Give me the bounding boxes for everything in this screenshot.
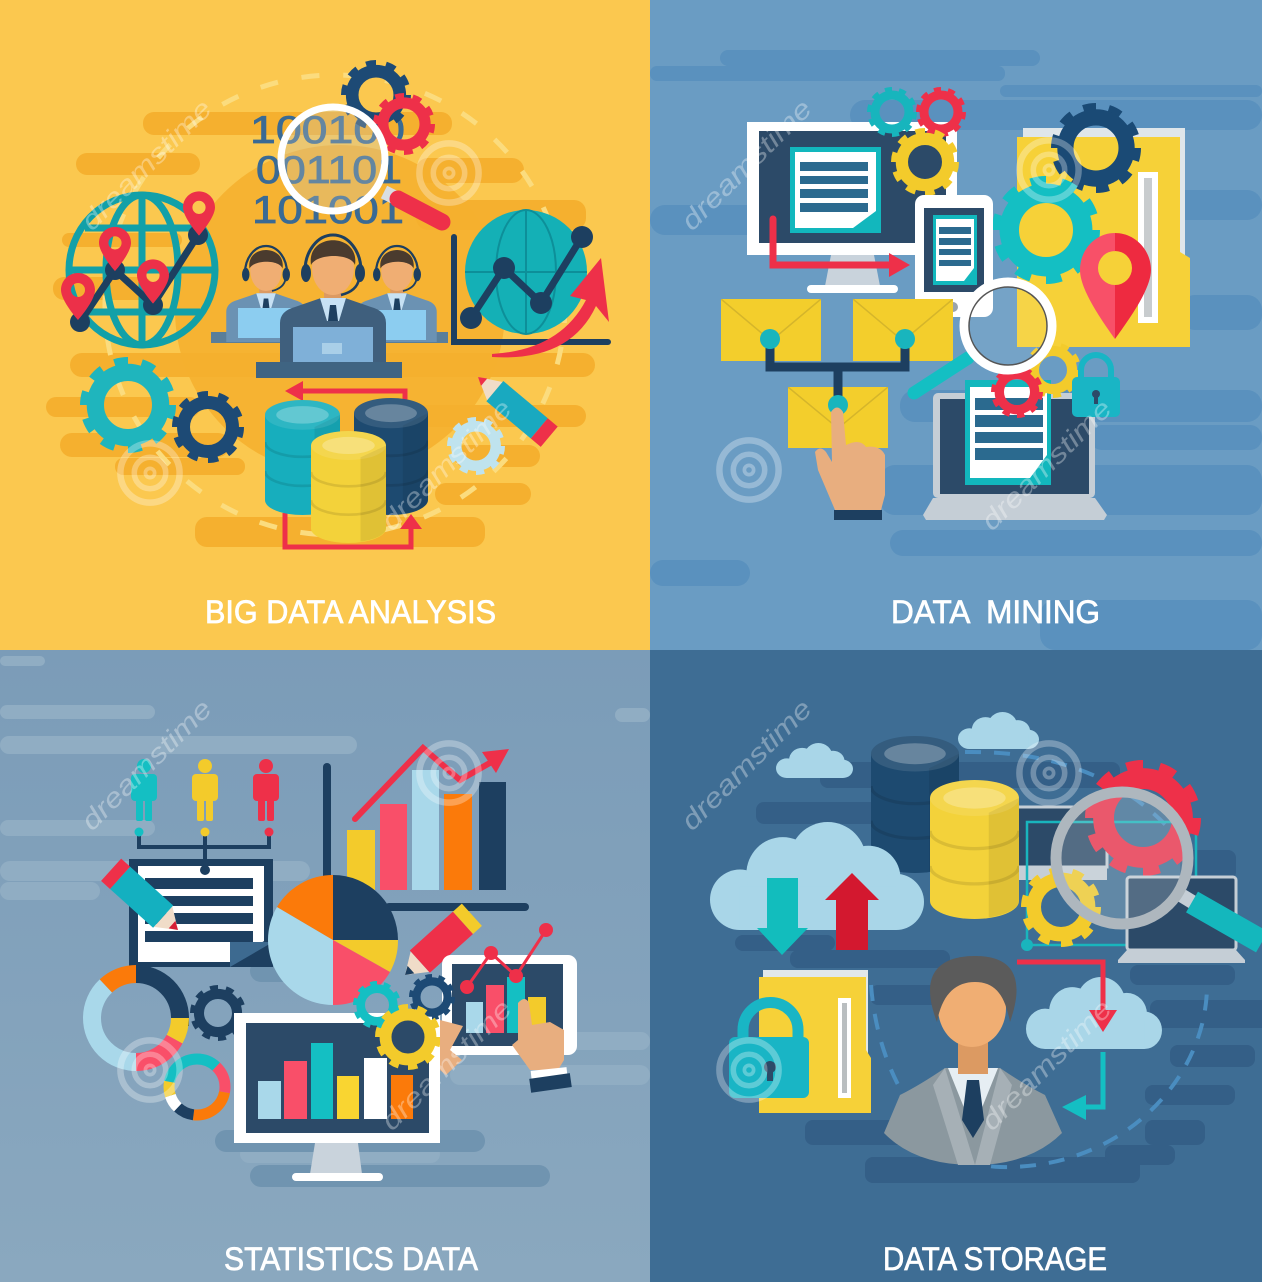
title: BIG DATA ANALYSIS — [205, 594, 496, 630]
icon: top gears — [345, 64, 431, 151]
icon: envelopes — [721, 299, 953, 448]
panel: statistics data — [0, 650, 650, 1282]
icon: desktop monitor with bars — [234, 1013, 440, 1181]
icon: small cloud top — [958, 712, 1039, 749]
panel: data mining — [650, 0, 1262, 650]
binary digits: 001101 — [256, 149, 402, 192]
icon: smartphone — [915, 195, 993, 317]
icon: pointing hand — [815, 408, 885, 520]
icon: dark database — [871, 736, 959, 873]
arrow: monitor to phone — [773, 219, 910, 277]
icon: large magnifier — [1056, 792, 1262, 942]
icon: gears left — [86, 363, 240, 459]
binary digits — [250, 109, 405, 232]
icon: padlock — [1072, 355, 1120, 417]
icon: hands on tablet — [440, 999, 572, 1093]
icon: location pin — [1080, 233, 1151, 339]
title: DATA STORAGE — [883, 1241, 1107, 1277]
panel: data storage — [650, 650, 1262, 1282]
icon: desktop monitor — [747, 122, 957, 293]
icon: folder gears — [998, 108, 1136, 278]
icon: globe with pins — [61, 191, 215, 345]
icon: folder with padlock — [729, 970, 871, 1113]
icon: yellow database — [930, 780, 1019, 919]
icon: cloud with arrows — [1017, 962, 1162, 1120]
icon: red and yellow gears — [1026, 767, 1194, 942]
dashed links — [871, 752, 1207, 1167]
icon: teal pencil — [101, 859, 188, 941]
watermark: dreamstime — [75, 693, 218, 836]
icon: pale gear — [450, 420, 502, 472]
watermark — [75, 93, 1118, 1136]
watermark: dreamstime — [675, 93, 818, 236]
icon: three support agents — [211, 235, 448, 378]
icon: document — [129, 859, 273, 967]
icon: cluster of gears — [356, 977, 452, 1066]
icon: tablet with chart — [442, 923, 577, 1055]
watermark: dreamstime — [975, 393, 1118, 536]
icon: database cylinders — [265, 381, 428, 547]
icon: red pencil — [395, 904, 482, 986]
icon: big cloud with arrows — [710, 822, 924, 955]
icon: three people — [131, 759, 279, 870]
icon: laptop gears — [994, 345, 1078, 415]
icon: small cloud left — [776, 743, 853, 778]
icon: laptop with document — [923, 380, 1107, 520]
title: DATA MINING — [891, 594, 1100, 630]
watermark: dreamstime — [375, 393, 518, 536]
binary digits: 100100 — [250, 109, 405, 152]
icon: laptop behind — [1015, 807, 1107, 880]
icon: magnifier — [914, 282, 1052, 393]
icon: monitor gears — [870, 90, 963, 192]
bar chart: columns with trend — [323, 748, 529, 911]
icon: folder — [1017, 128, 1190, 347]
icon: pencil — [470, 367, 558, 447]
chart: small donut — [169, 1059, 225, 1115]
icon: dark gear — [193, 988, 243, 1038]
icon: teal frame — [1021, 822, 1196, 951]
chart: large donut — [92, 974, 180, 1062]
panel: big data analysis — [0, 0, 650, 650]
binary digits: 101001 — [252, 189, 404, 232]
watermark: dreamstime — [375, 993, 518, 1136]
icon: businessman — [884, 956, 1062, 1165]
icon: small laptop — [1118, 877, 1245, 963]
watermark: dreamstime — [75, 93, 218, 236]
watermark: dreamstime — [975, 993, 1118, 1136]
watermark: dreamstime — [675, 693, 818, 836]
icon: magnifier — [281, 107, 442, 222]
pie chart — [268, 875, 398, 1005]
title: STATISTICS DATA — [224, 1241, 479, 1277]
chart: growth globe — [454, 210, 609, 357]
